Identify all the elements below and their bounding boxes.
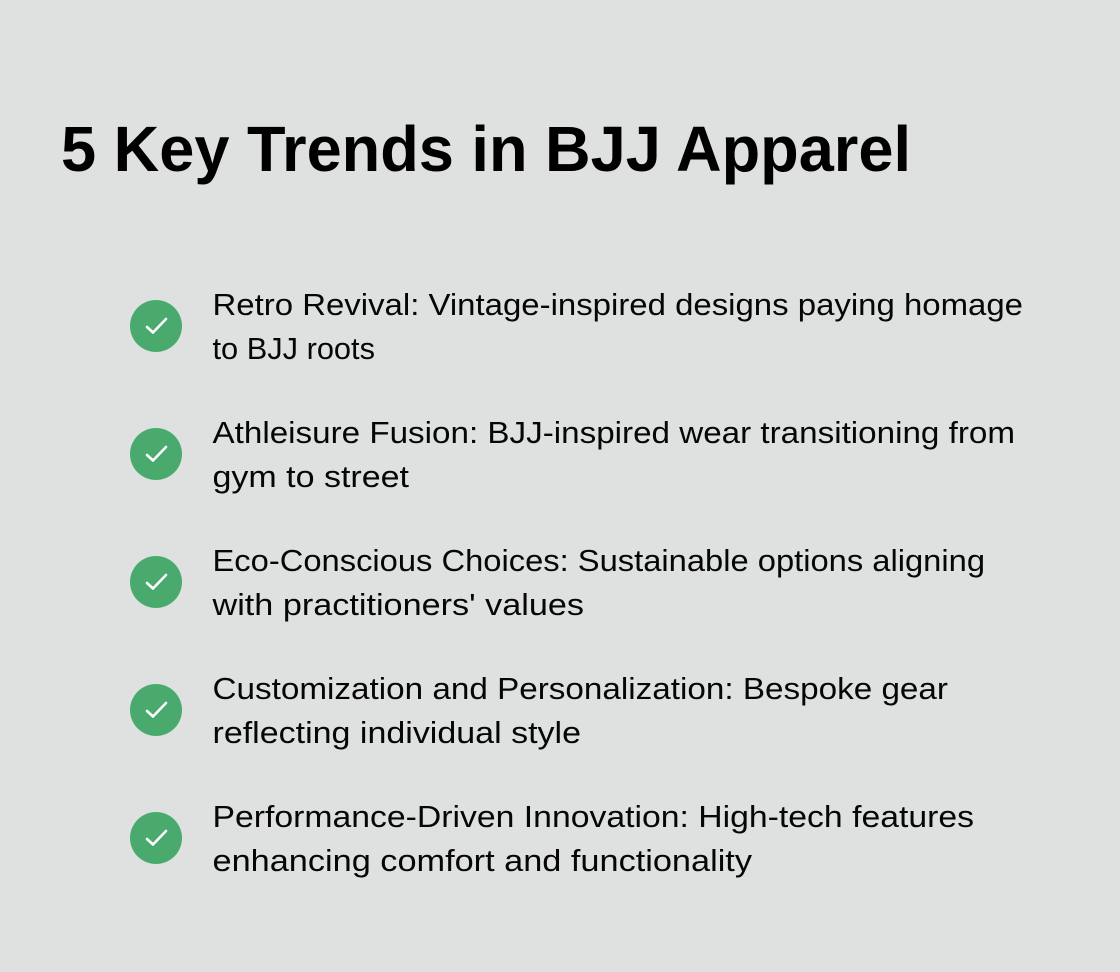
item text [212,799,974,878]
item text [212,671,948,750]
list item: Eco-Conscious Choices [130,543,985,622]
item text: Retro Revival: Vintage-inspired designs paying homage [212,287,1023,322]
item text [211,543,985,622]
title: 5 Key Trends in BJJ Apparel [61,113,911,185]
icon: check circle [130,428,182,480]
list item: Retro Revival [130,287,1023,366]
item text: enhancing comfort and functionality [212,843,753,878]
item text [212,287,1023,366]
item text: with practitioners' values [211,587,584,622]
item text: reflecting individual style [212,715,581,750]
icon: check circle [130,684,182,736]
item text: Performance-Driven Innovation: High-tech features [212,799,974,834]
icon: check circle [130,300,182,352]
list item: Customization and Personalization [130,671,948,750]
icon: check circle [130,556,182,608]
item text [212,415,1015,494]
item text: Athleisure Fusion: BJJ-inspired wear transitioning from [212,415,1015,450]
list item: Performance-Driven Innovation [130,799,974,878]
item text: to BJJ roots [212,331,375,366]
item text: gym to street [212,459,409,494]
list item: Athleisure Fusion [130,415,1015,494]
item text: Customization and Personalization: Bespoke gear [212,671,948,706]
icon: check circle [130,812,182,864]
item text: Eco-Conscious Choices: Sustainable options aligning [212,543,985,578]
